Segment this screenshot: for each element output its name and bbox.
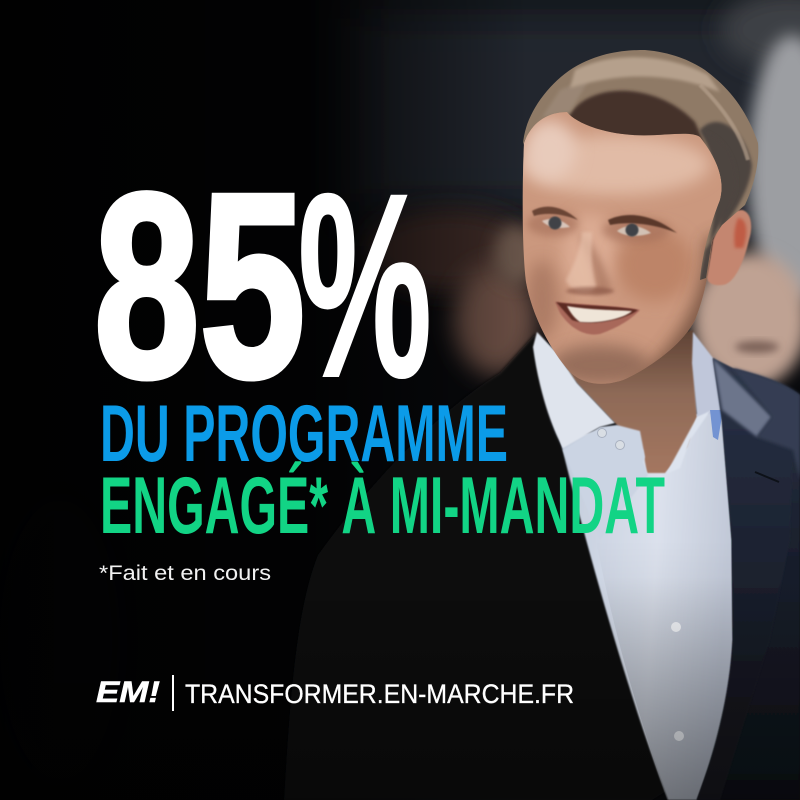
nose shadow <box>578 232 612 296</box>
shirt placket <box>563 425 648 540</box>
ear <box>707 210 751 285</box>
collar left <box>533 332 615 448</box>
jacket right side <box>697 358 800 800</box>
nose highlight <box>566 232 596 292</box>
jacket pocket slit <box>755 472 779 482</box>
shirt buttons <box>671 622 681 632</box>
logo and url footer <box>96 675 574 711</box>
blue collar lining <box>710 410 723 440</box>
eyebrows <box>532 207 578 220</box>
shirt <box>560 410 733 800</box>
subtitle: du programme: DU PROGRAMME <box>100 389 508 479</box>
headline number: 85% <box>94 140 432 432</box>
headline number: 85%: % <box>298 141 432 432</box>
footnote: *Fait et en cours <box>99 562 271 585</box>
jacket lapel <box>697 358 793 800</box>
jacket shoulder <box>733 368 800 480</box>
mouth interior <box>556 302 638 323</box>
photo: man in suit <box>284 45 800 800</box>
logo: EM!: EM! <box>96 676 160 709</box>
face <box>522 112 722 384</box>
eyes <box>542 219 570 228</box>
hair <box>515 45 765 285</box>
eye sockets <box>527 212 579 236</box>
headline number: 85%: 85 <box>94 140 305 432</box>
teeth <box>567 306 632 322</box>
neck <box>567 330 697 473</box>
collar right <box>692 332 723 417</box>
website url: TRANSFORMER.EN-MARCHE.FR <box>185 679 574 709</box>
jacket left side <box>284 333 668 800</box>
mouth <box>555 302 640 335</box>
